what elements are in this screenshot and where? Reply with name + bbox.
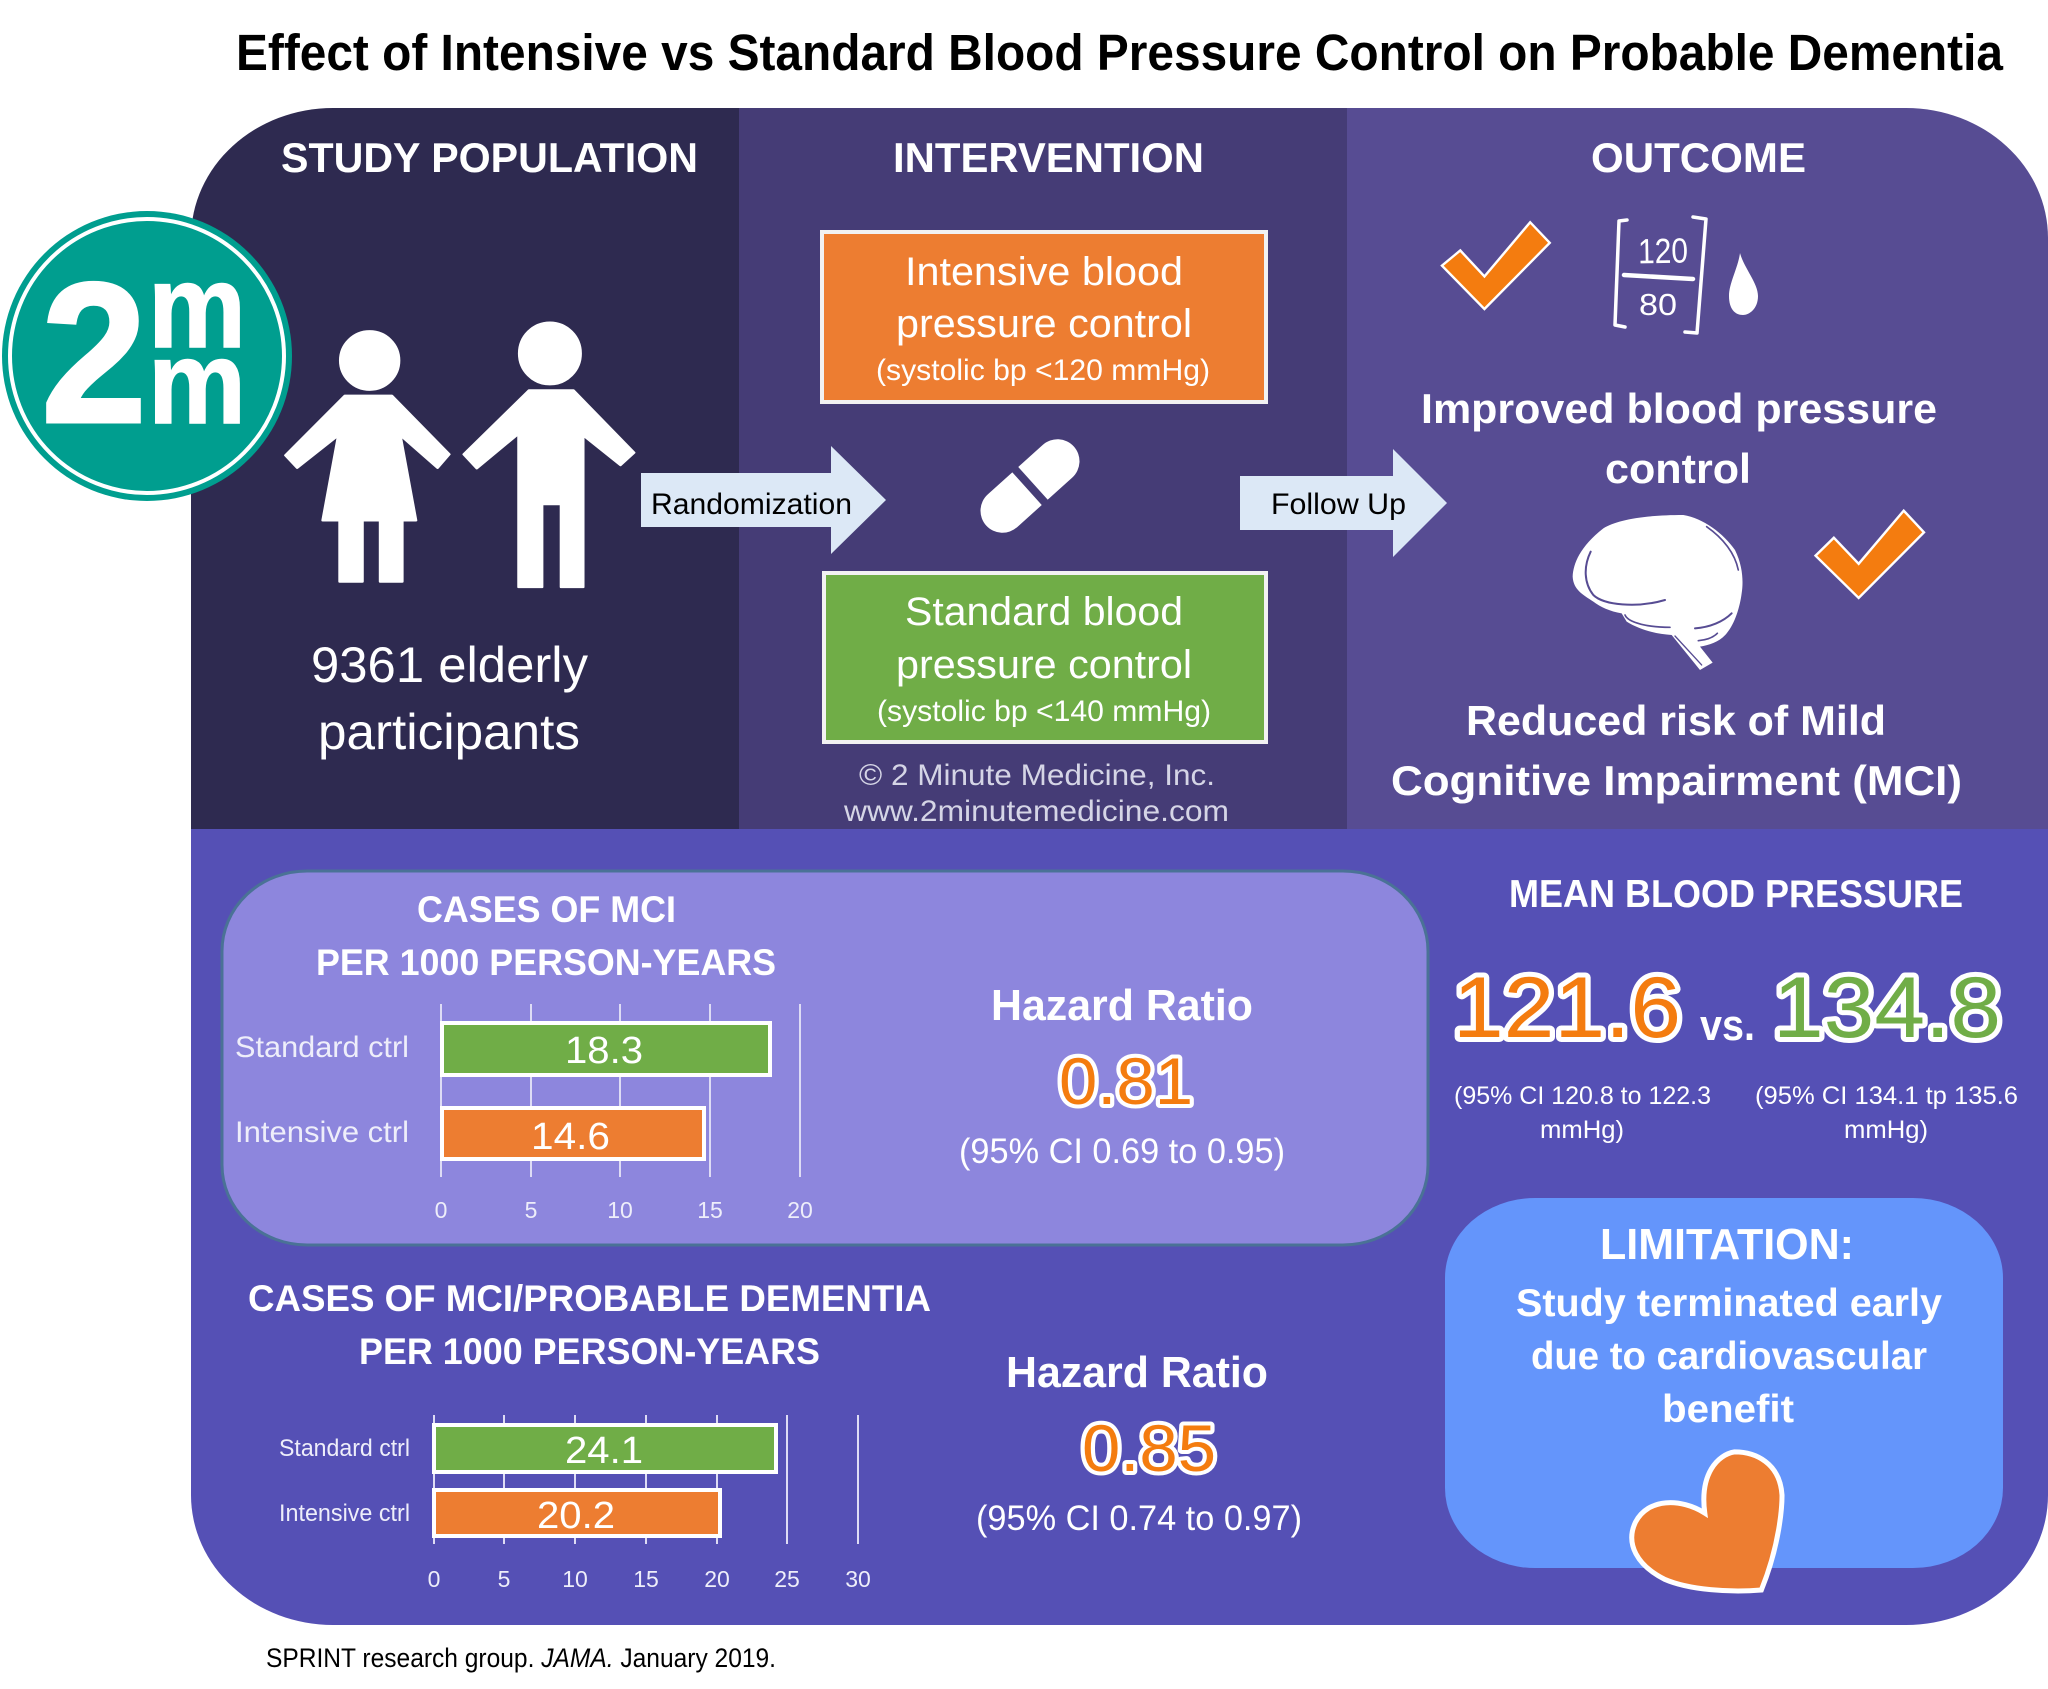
bar chart: MCI or probable dementia: 24.1 bbox=[565, 1430, 643, 1472]
text: participants: 9361 elderly bbox=[311, 637, 588, 693]
copyright: © 2 Minute Medicine, Inc. bbox=[859, 759, 1215, 792]
logo: 2 minute medicine bbox=[2, 211, 292, 501]
bar chart: MCI: 5 bbox=[525, 1197, 537, 1223]
hazard ratio: MCI bbox=[959, 981, 1285, 1171]
heading: MCI or probable dementia: PER 1000 PERSON-YEARS bbox=[359, 1331, 820, 1372]
bar chart: MCI or probable dementia bbox=[279, 1415, 871, 1592]
text: confidence interval standard: (95% CI 134.1 tp 135.6 bbox=[1755, 1082, 2018, 1110]
hazard ratio: MCI: Hazard Ratio bbox=[991, 981, 1253, 1030]
text: limitation detail: due to cardiovascular bbox=[1531, 1335, 1927, 1378]
copyright bbox=[843, 759, 1229, 828]
box: intensive control: Intensive blood bbox=[905, 250, 1183, 294]
heading: mean blood pressure: MEAN BLOOD PRESSURE bbox=[1509, 873, 1963, 916]
bar chart: MCI: Standard ctrl bbox=[235, 1031, 409, 1064]
text: reduced risk: Cognitive Impairment (MCI) bbox=[1391, 757, 1962, 804]
hazard ratio: MCI: (95% CI 0.69 to 0.95) bbox=[959, 1132, 1285, 1171]
text: participants: participants bbox=[318, 704, 580, 760]
heading: cases of MCI bbox=[316, 889, 776, 983]
panel: cases of MCI or probable dementia bbox=[248, 1278, 1302, 1592]
text: confidence interval intensive: mmHg) bbox=[1540, 1116, 1624, 1144]
arrow: follow up: Follow Up bbox=[1271, 488, 1406, 521]
icon: heart bbox=[1632, 1452, 1782, 1591]
hazard ratio: dementia: (95% CI 0.74 to 0.97) bbox=[976, 1499, 1302, 1538]
heading: cases of MCI: PER 1000 PERSON-YEARS bbox=[316, 942, 776, 983]
box: standard control: Standard blood bbox=[905, 590, 1183, 634]
panel: cases of MCI bbox=[222, 871, 1428, 1245]
bar chart: MCI or probable dementia: 10 bbox=[562, 1566, 588, 1592]
text: improved control: Improved blood pressure bbox=[1421, 385, 1937, 432]
icon: check mark 2 bbox=[1816, 511, 1924, 598]
bar chart: MCI: 15 bbox=[697, 1197, 723, 1223]
bar chart: MCI: 14.6 bbox=[531, 1116, 610, 1158]
copyright: www.2minutemedicine.com bbox=[843, 795, 1229, 828]
icon: two people bbox=[285, 323, 634, 587]
hazard ratio: dementia bbox=[976, 1348, 1302, 1538]
bar chart: MCI: 10 bbox=[607, 1197, 633, 1223]
bar chart: MCI or probable dementia: 20.2 bbox=[537, 1495, 615, 1537]
panel: outcome bbox=[1391, 134, 1962, 804]
box: standard control: (systolic bp <140 mmHg) bbox=[877, 695, 1211, 728]
heading: MCI or probable dementia: CASES OF MCI/PROBABLE DEMENTIA bbox=[248, 1278, 931, 1319]
arrow: randomization bbox=[641, 446, 886, 554]
icon: blood pressure reading bbox=[1615, 217, 1758, 333]
text: reduced risk bbox=[1391, 697, 1962, 804]
icon: blood pressure reading: 80 bbox=[1639, 287, 1677, 322]
text: improved control: control bbox=[1605, 445, 1751, 492]
bar chart: MCI or probable dementia: 20 bbox=[704, 1566, 730, 1592]
text: confidence interval intensive: (95% CI 120.8 to 122.3 bbox=[1454, 1082, 1711, 1110]
text: limitation detail: benefit bbox=[1662, 1388, 1794, 1431]
logo: 2 minute medicine: m bbox=[148, 317, 246, 449]
text: confidence interval intensive bbox=[1454, 1082, 1711, 1144]
arrow: randomization: Randomization bbox=[651, 488, 852, 521]
text: confidence interval standard bbox=[1755, 1082, 2018, 1144]
box: standard control: pressure control bbox=[896, 643, 1192, 687]
text: vs: vs. bbox=[1700, 1001, 1755, 1050]
text: reduced risk: Reduced risk of Mild bbox=[1466, 697, 1886, 744]
heading: limitation: LIMITATION: bbox=[1600, 1220, 1854, 1269]
logo: 2 minute medicine: m bbox=[148, 241, 246, 373]
icon: blood pressure reading: 120 bbox=[1638, 232, 1688, 271]
bar chart: MCI or probable dementia: Intensive ctrl bbox=[279, 1500, 410, 1527]
hazard ratio: MCI: 0.81 bbox=[1059, 1044, 1193, 1118]
arrow: follow up bbox=[1240, 449, 1447, 557]
box: standard control bbox=[824, 573, 1266, 742]
icon: brain bbox=[1573, 515, 1743, 670]
box: intensive control: (systolic bp <120 mmHg) bbox=[876, 354, 1210, 387]
hazard ratio: dementia: 0.85 bbox=[1082, 1411, 1216, 1485]
bar chart: MCI or probable dementia: 30 bbox=[845, 1566, 871, 1592]
heading: cases of MCI: CASES OF MCI bbox=[417, 889, 676, 930]
bar chart: MCI: Intensive ctrl bbox=[235, 1116, 409, 1149]
panel: intervention bbox=[822, 134, 1266, 828]
box: intensive control: pressure control bbox=[896, 302, 1192, 346]
hazard ratio: dementia: Hazard Ratio bbox=[1006, 1348, 1268, 1397]
bar chart: MCI or probable dementia: Standard ctrl bbox=[279, 1435, 410, 1462]
text: limitation detail bbox=[1516, 1282, 1942, 1431]
text: participants bbox=[311, 637, 588, 760]
bar chart: MCI bbox=[235, 1004, 813, 1223]
bar chart: MCI or probable dementia: 0 bbox=[428, 1566, 440, 1592]
text: confidence interval standard: mmHg) bbox=[1844, 1116, 1928, 1144]
heading: study population: STUDY POPULATION bbox=[281, 134, 698, 181]
panel: study population bbox=[281, 134, 698, 760]
icon: pill bbox=[969, 427, 1091, 545]
icon: check mark 1 bbox=[1442, 222, 1550, 309]
bar chart: MCI or probable dementia: 15 bbox=[633, 1566, 659, 1592]
bar chart: MCI or probable dementia: 5 bbox=[498, 1566, 510, 1592]
panel: limitation bbox=[1445, 1198, 2003, 1591]
bar chart: MCI or probable dementia: 25 bbox=[774, 1566, 800, 1592]
bar chart: MCI: 20 bbox=[787, 1197, 813, 1223]
box: intensive control bbox=[822, 232, 1266, 402]
bar chart: MCI: 18.3 bbox=[565, 1030, 643, 1072]
heading: MCI or probable dementia bbox=[248, 1278, 931, 1372]
value: intensive mean: 121.6 bbox=[1453, 960, 1681, 1056]
heading: outcome: OUTCOME bbox=[1591, 134, 1806, 181]
panel: mean blood pressure bbox=[1453, 873, 2018, 1144]
citation: SPRINT research group. JAMA. January 2019. bbox=[266, 1643, 776, 1673]
text: limitation detail: Study terminated early bbox=[1516, 1282, 1942, 1325]
text: improved control bbox=[1421, 385, 1937, 492]
heading: intervention: INTERVENTION bbox=[893, 134, 1204, 181]
bar chart: MCI: 0 bbox=[435, 1197, 447, 1223]
logo: 2 minute medicine: 2 bbox=[41, 242, 147, 465]
value: standard mean: 134.8 bbox=[1773, 960, 2001, 1056]
